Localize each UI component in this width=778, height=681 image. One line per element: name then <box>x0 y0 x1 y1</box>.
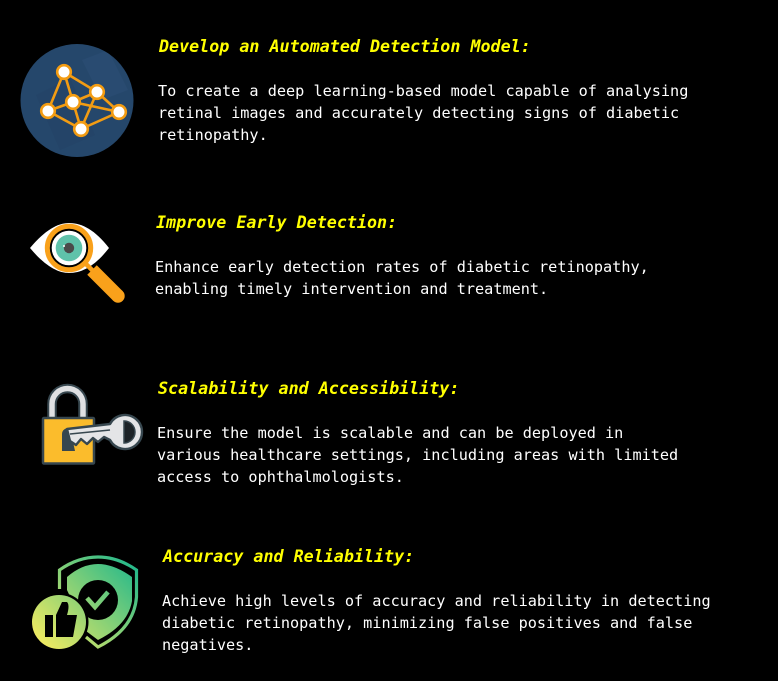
icon: shield and thumbs up <box>32 555 138 649</box>
heading: automated detection model: Develop an Automated Detection Model: <box>159 36 531 56</box>
text: scalability: Ensure the model is scalable and can be deployed in various healthcare settings, including areas with limited access to ophthalmologists. <box>157 424 678 486</box>
text: automated detection model: To create a deep learning-based model capable of analysing retinal images and accurately detecting signs of diabetic retinopathy. <box>158 82 688 144</box>
icon: eye and magnifying glass <box>30 223 125 303</box>
icon: padlock and key <box>42 384 144 465</box>
heading: scalability: Scalability and Accessibility: <box>158 378 459 398</box>
heading: early detection: Improve Early Detection: <box>156 212 397 232</box>
text: accuracy: Achieve high levels of accuracy and reliability in detecting diabetic retinopathy, minimizing false positives and false negatives. <box>162 592 711 654</box>
text: early detection: Enhance early detection rates of diabetic retinopathy, enabling timely intervention and treatment. <box>155 258 649 298</box>
heading: accuracy: Accuracy and Reliability: <box>163 546 414 566</box>
icon: neural network <box>20 44 134 157</box>
